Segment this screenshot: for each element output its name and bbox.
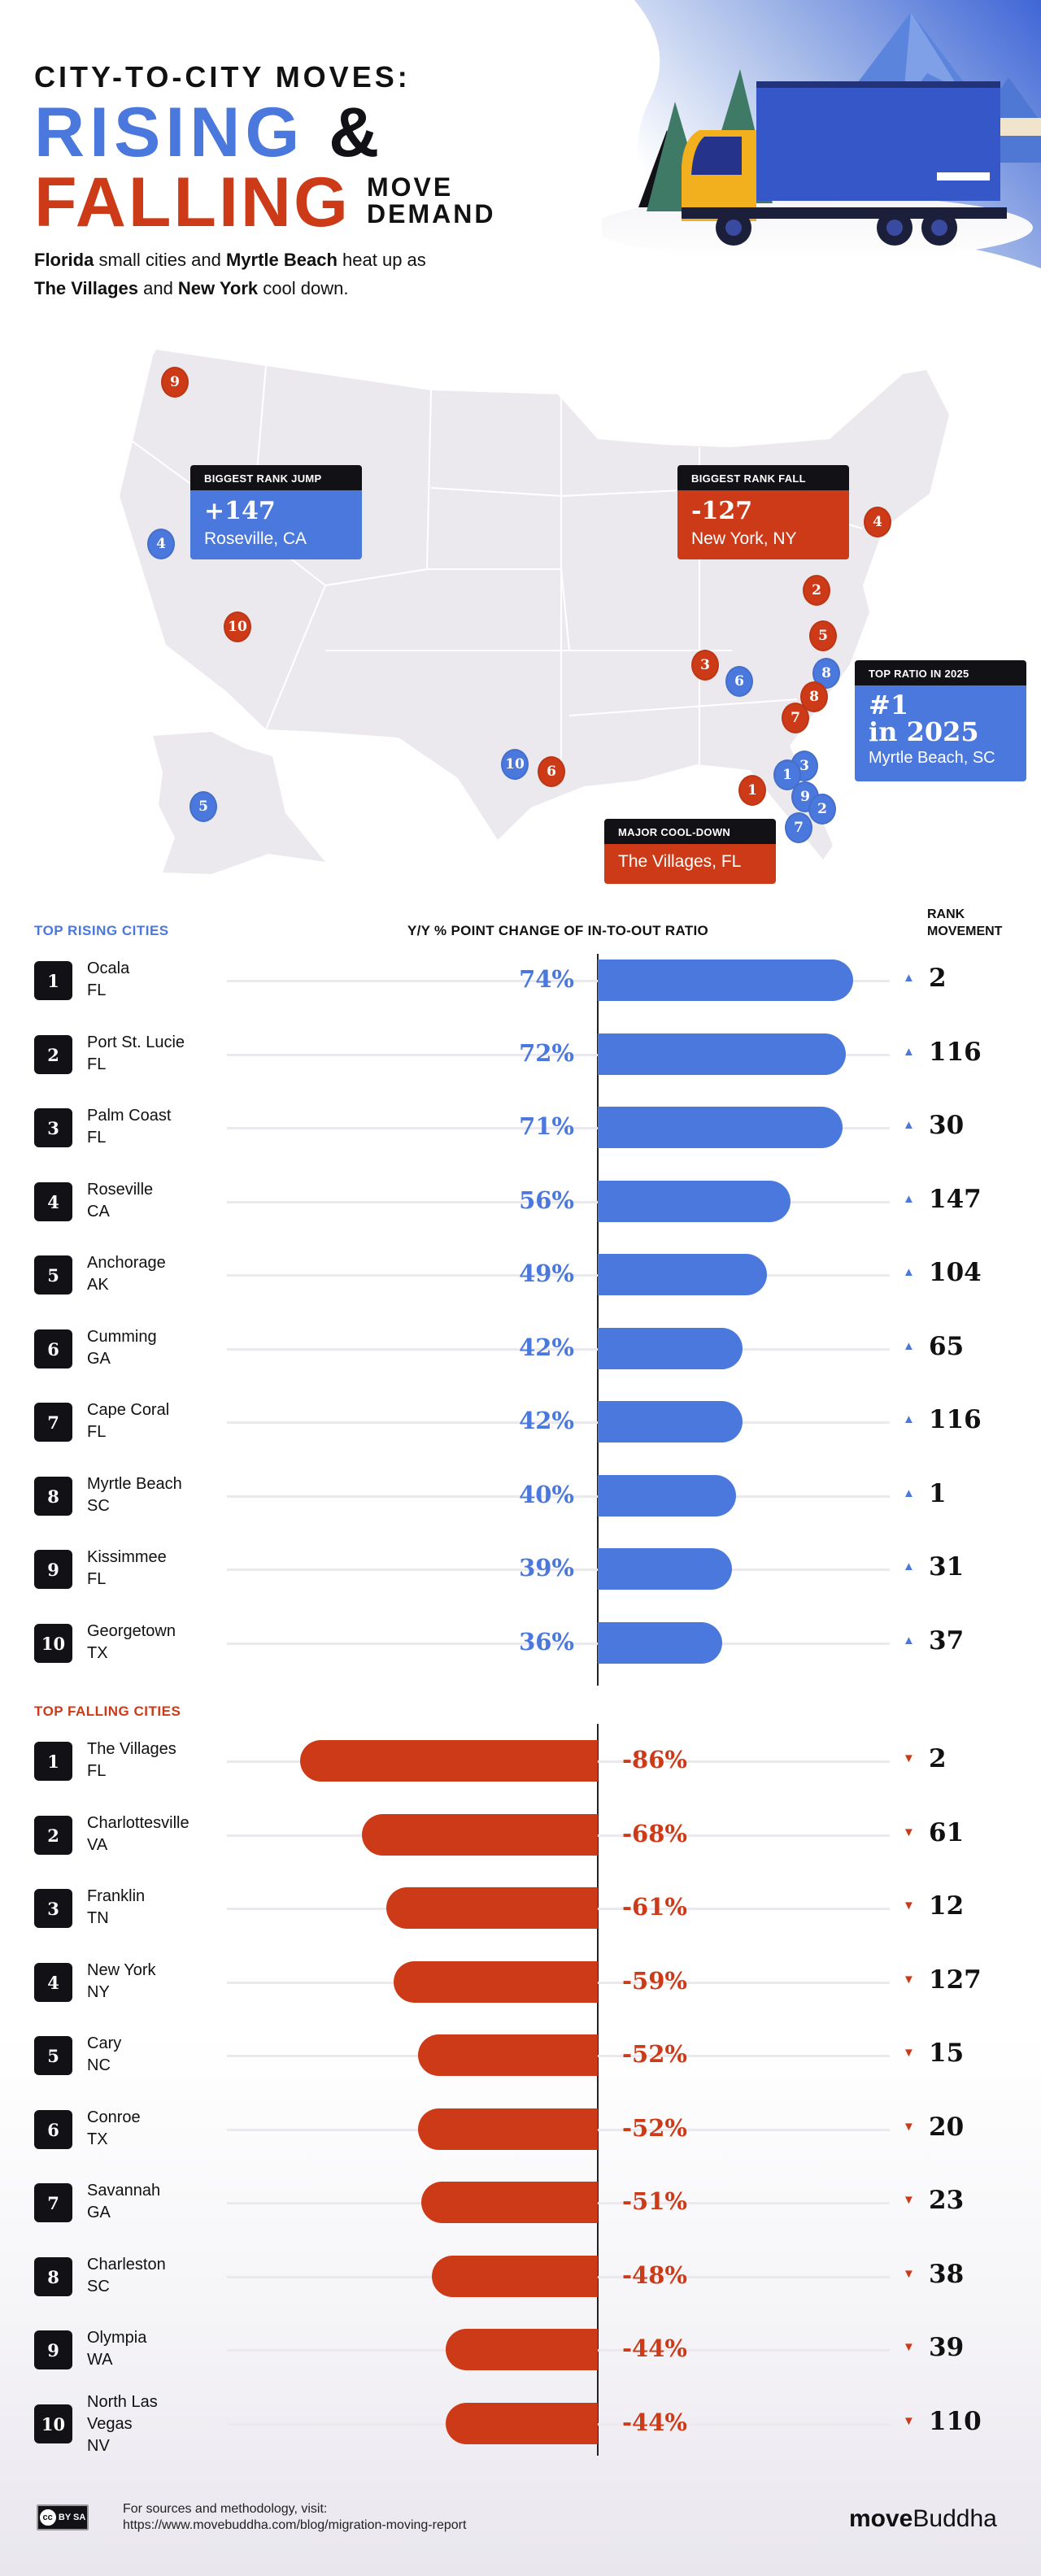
text: 6 bbox=[47, 2119, 59, 2140]
text: 38 bbox=[929, 2260, 964, 2289]
map markers: 3 bbox=[700, 657, 710, 673]
text: 42% bbox=[519, 1407, 574, 1434]
text: 116 bbox=[929, 1405, 982, 1434]
text: 71% bbox=[519, 1112, 574, 1140]
text: FL bbox=[87, 1762, 106, 1780]
text: -44% bbox=[622, 2408, 687, 2436]
text: ▲ bbox=[903, 1486, 915, 1500]
text: ▲ bbox=[903, 1265, 915, 1279]
text: 2 bbox=[929, 1744, 947, 1773]
axis label: Y/Y % POINT CHANGE OF IN-TO-OUT RATIO bbox=[407, 923, 708, 938]
text: -52% bbox=[622, 2040, 687, 2068]
map markers: 1 bbox=[782, 767, 792, 783]
text: TX bbox=[87, 2130, 108, 2148]
map markers: 8 bbox=[809, 689, 819, 705]
text: 4 bbox=[47, 1192, 59, 1212]
subtitle bbox=[34, 250, 426, 298]
text: CA bbox=[87, 1203, 110, 1221]
text: 31 bbox=[929, 1552, 964, 1582]
text: 104 bbox=[929, 1258, 982, 1287]
text: 56% bbox=[519, 1186, 574, 1214]
title bbox=[34, 60, 495, 242]
text: 42% bbox=[519, 1334, 574, 1361]
text: VA bbox=[87, 1836, 107, 1854]
text: Anchorage bbox=[87, 1254, 166, 1272]
text: 3 bbox=[47, 1117, 59, 1138]
text: ▲ bbox=[903, 1412, 915, 1426]
chart header: top rising: TOP RISING CITIES bbox=[34, 923, 169, 938]
map markers: 6 bbox=[734, 673, 744, 690]
callout: biggest rank fall: BIGGEST RANK FALL bbox=[691, 472, 806, 485]
text: NC bbox=[87, 2056, 111, 2074]
text: 61 bbox=[929, 1818, 964, 1847]
map markers: 2 bbox=[812, 582, 821, 598]
text: 3 bbox=[47, 1898, 59, 1919]
text: Vegas bbox=[87, 2415, 133, 2433]
map markers bbox=[147, 367, 891, 843]
rising chart bbox=[597, 954, 599, 1686]
text: Kissimmee bbox=[87, 1548, 167, 1566]
text: 1 bbox=[47, 1751, 59, 1771]
map markers: 6 bbox=[547, 764, 556, 780]
text: ▼ bbox=[903, 2120, 915, 2134]
text: GA bbox=[87, 1350, 111, 1368]
text: 72% bbox=[519, 1039, 574, 1067]
text: 10 bbox=[41, 2413, 65, 2435]
callout: major cool-down bbox=[604, 819, 776, 884]
text: 10 bbox=[41, 1633, 65, 1654]
callout: biggest rank fall bbox=[677, 465, 849, 559]
logo: moveBuddha: moveBuddha bbox=[849, 2505, 997, 2532]
hero illustration: truck bbox=[609, 0, 1041, 268]
text: Cumming bbox=[87, 1328, 157, 1346]
text: FL bbox=[87, 1055, 106, 1073]
text: TX bbox=[87, 1644, 108, 1662]
text: 5 bbox=[47, 1265, 59, 1285]
map markers: 1 bbox=[747, 782, 757, 798]
text: WA bbox=[87, 2351, 112, 2369]
text: Franklin bbox=[87, 1887, 145, 1905]
text: Roseville bbox=[87, 1181, 153, 1199]
icon: cc license: BY SA bbox=[59, 2513, 85, 2522]
text: -61% bbox=[622, 1893, 687, 1921]
text: 2 bbox=[47, 1825, 59, 1846]
callout: major cool-down: MAJOR COOL-DOWN bbox=[618, 826, 730, 838]
title: CITY-TO-CITY MOVES: bbox=[34, 60, 411, 94]
text: ▼ bbox=[903, 2193, 915, 2207]
text: Charleston bbox=[87, 2256, 166, 2274]
map markers: 9 bbox=[170, 374, 180, 390]
map markers: 2 bbox=[817, 801, 827, 817]
text: 23 bbox=[929, 2186, 964, 2215]
text: FL bbox=[87, 1423, 106, 1441]
footer sources text: For sources and methodology, visit: bbox=[123, 2502, 327, 2516]
text: 49% bbox=[519, 1260, 574, 1287]
text: ▼ bbox=[903, 1751, 915, 1765]
callout: biggest rank jump bbox=[190, 465, 362, 559]
text: -44% bbox=[622, 2334, 687, 2362]
text: 30 bbox=[929, 1111, 964, 1140]
text: -51% bbox=[622, 2187, 687, 2215]
text: -48% bbox=[622, 2261, 687, 2289]
text: ▲ bbox=[903, 1560, 915, 1573]
callout: biggest rank jump: BIGGEST RANK JUMP bbox=[204, 472, 322, 485]
map markers: 8 bbox=[821, 665, 831, 681]
text: Savannah bbox=[87, 2182, 160, 2200]
text: SC bbox=[87, 1497, 110, 1515]
text: ▲ bbox=[903, 1118, 915, 1132]
text: 1 bbox=[929, 1479, 947, 1508]
text: 2 bbox=[47, 1044, 59, 1065]
text: SC bbox=[87, 2278, 110, 2295]
text: NY bbox=[87, 1983, 110, 2001]
text: 7 bbox=[47, 1412, 59, 1433]
text: Port St. Lucie bbox=[87, 1033, 185, 1051]
text: -86% bbox=[622, 1746, 687, 1773]
rank movement label: MOVEMENT bbox=[927, 925, 1002, 938]
text: Charlottesville bbox=[87, 1814, 189, 1832]
text: 36% bbox=[519, 1628, 574, 1656]
map markers: 3 bbox=[799, 758, 809, 774]
callout: biggest rank fall: -127 bbox=[691, 497, 752, 525]
text: 20 bbox=[929, 2113, 964, 2142]
map markers: 4 bbox=[156, 536, 166, 552]
text: ▲ bbox=[903, 1045, 915, 1059]
text: New York bbox=[87, 1961, 156, 1979]
text: ▲ bbox=[903, 971, 915, 985]
text: Palm Coast bbox=[87, 1107, 171, 1125]
text: FL bbox=[87, 1129, 106, 1147]
icon: cc license bbox=[37, 2504, 89, 2530]
text: 147 bbox=[929, 1185, 982, 1214]
callout: top ratio in 2025 bbox=[855, 660, 1026, 781]
text: Myrtle Beach bbox=[87, 1475, 182, 1493]
text: -59% bbox=[622, 1967, 687, 1995]
text: Cary bbox=[87, 2034, 121, 2052]
text: ▼ bbox=[903, 2414, 915, 2428]
text: NV bbox=[87, 2437, 110, 2455]
text: 8 bbox=[47, 2267, 59, 2287]
map markers: 10 bbox=[228, 619, 247, 635]
footer sources text bbox=[123, 2502, 467, 2532]
text: 65 bbox=[929, 1332, 964, 1361]
text: ▲ bbox=[903, 1339, 915, 1353]
text: 9 bbox=[47, 1560, 59, 1579]
map markers: 10 bbox=[505, 756, 525, 772]
callout: biggest rank jump: Roseville, CA bbox=[204, 529, 307, 548]
map markers: 7 bbox=[794, 820, 804, 836]
text: Olympia bbox=[87, 2329, 146, 2347]
title: MOVE bbox=[367, 172, 453, 202]
title: DEMAND bbox=[367, 199, 495, 228]
text: 9 bbox=[47, 2340, 59, 2360]
text: 39% bbox=[519, 1554, 574, 1582]
callout: major cool-down: The Villages, FL bbox=[618, 852, 741, 871]
text: 110 bbox=[929, 2407, 982, 2436]
text: 5 bbox=[47, 2046, 59, 2065]
text: 127 bbox=[929, 1965, 982, 1995]
text: ▲ bbox=[903, 1192, 915, 1206]
text: 6 bbox=[47, 1338, 59, 1360]
text: -52% bbox=[622, 2114, 687, 2142]
callout: top ratio in 2025: Myrtle Beach, SC bbox=[869, 749, 995, 767]
chart header: top falling: TOP FALLING CITIES bbox=[34, 1704, 181, 1719]
callout: top ratio in 2025: #1 bbox=[869, 690, 908, 720]
callout: top ratio in 2025: TOP RATIO IN 2025 bbox=[869, 668, 969, 680]
text: 39 bbox=[929, 2333, 964, 2362]
rank movement label bbox=[927, 907, 1002, 938]
text: AK bbox=[87, 1276, 109, 1294]
text: GA bbox=[87, 2204, 111, 2221]
text: ▼ bbox=[903, 1825, 915, 1839]
footer sources text: https://www.movebuddha.com/blog/migration-moving-report bbox=[123, 2518, 466, 2532]
text: Conroe bbox=[87, 2108, 141, 2126]
text: 8 bbox=[47, 1486, 59, 1506]
falling chart bbox=[597, 1724, 599, 2456]
text: North Las bbox=[87, 2393, 158, 2411]
text: 4 bbox=[47, 1973, 59, 1992]
text: 7 bbox=[47, 2192, 59, 2213]
text: -68% bbox=[622, 1820, 687, 1847]
callout: biggest rank jump: +147 bbox=[204, 497, 276, 525]
text: 15 bbox=[929, 2039, 964, 2068]
text: ▲ bbox=[903, 1634, 915, 1647]
text: ▼ bbox=[903, 1973, 915, 1986]
text: 2 bbox=[929, 964, 947, 993]
text: The Villages bbox=[87, 1740, 176, 1758]
text: ▼ bbox=[903, 2046, 915, 2060]
text: FL bbox=[87, 981, 106, 999]
text: 74% bbox=[519, 965, 574, 993]
text: Cape Coral bbox=[87, 1401, 169, 1419]
map markers: 5 bbox=[198, 798, 208, 815]
text: ▼ bbox=[903, 2340, 915, 2354]
map markers: 9 bbox=[800, 789, 810, 805]
title: FALLING bbox=[34, 163, 351, 242]
map bbox=[120, 350, 949, 874]
callout: biggest rank fall: New York, NY bbox=[691, 529, 797, 548]
icon: cc license: cc bbox=[43, 2513, 53, 2522]
map markers: 4 bbox=[873, 514, 882, 530]
subtitle: Florida small cities and Myrtle Beach heat up as bbox=[34, 250, 426, 270]
map markers: 7 bbox=[791, 710, 800, 726]
text: Ocala bbox=[87, 959, 129, 977]
text: 12 bbox=[929, 1891, 964, 1921]
title: RISING & bbox=[34, 94, 379, 172]
rank movement label: RANK bbox=[927, 907, 965, 921]
map markers: 5 bbox=[818, 628, 828, 644]
text: TN bbox=[87, 1909, 109, 1927]
text: 40% bbox=[519, 1481, 574, 1508]
text: 116 bbox=[929, 1038, 982, 1067]
text: ▼ bbox=[903, 2267, 915, 2281]
text: 1 bbox=[47, 971, 59, 990]
text: ▼ bbox=[903, 1899, 915, 1912]
text: FL bbox=[87, 1570, 106, 1588]
text: 37 bbox=[929, 1626, 964, 1656]
subtitle: The Villages and New York cool down. bbox=[34, 278, 348, 298]
callout: top ratio in 2025: in 2025 bbox=[869, 716, 979, 747]
text: Georgetown bbox=[87, 1622, 176, 1640]
